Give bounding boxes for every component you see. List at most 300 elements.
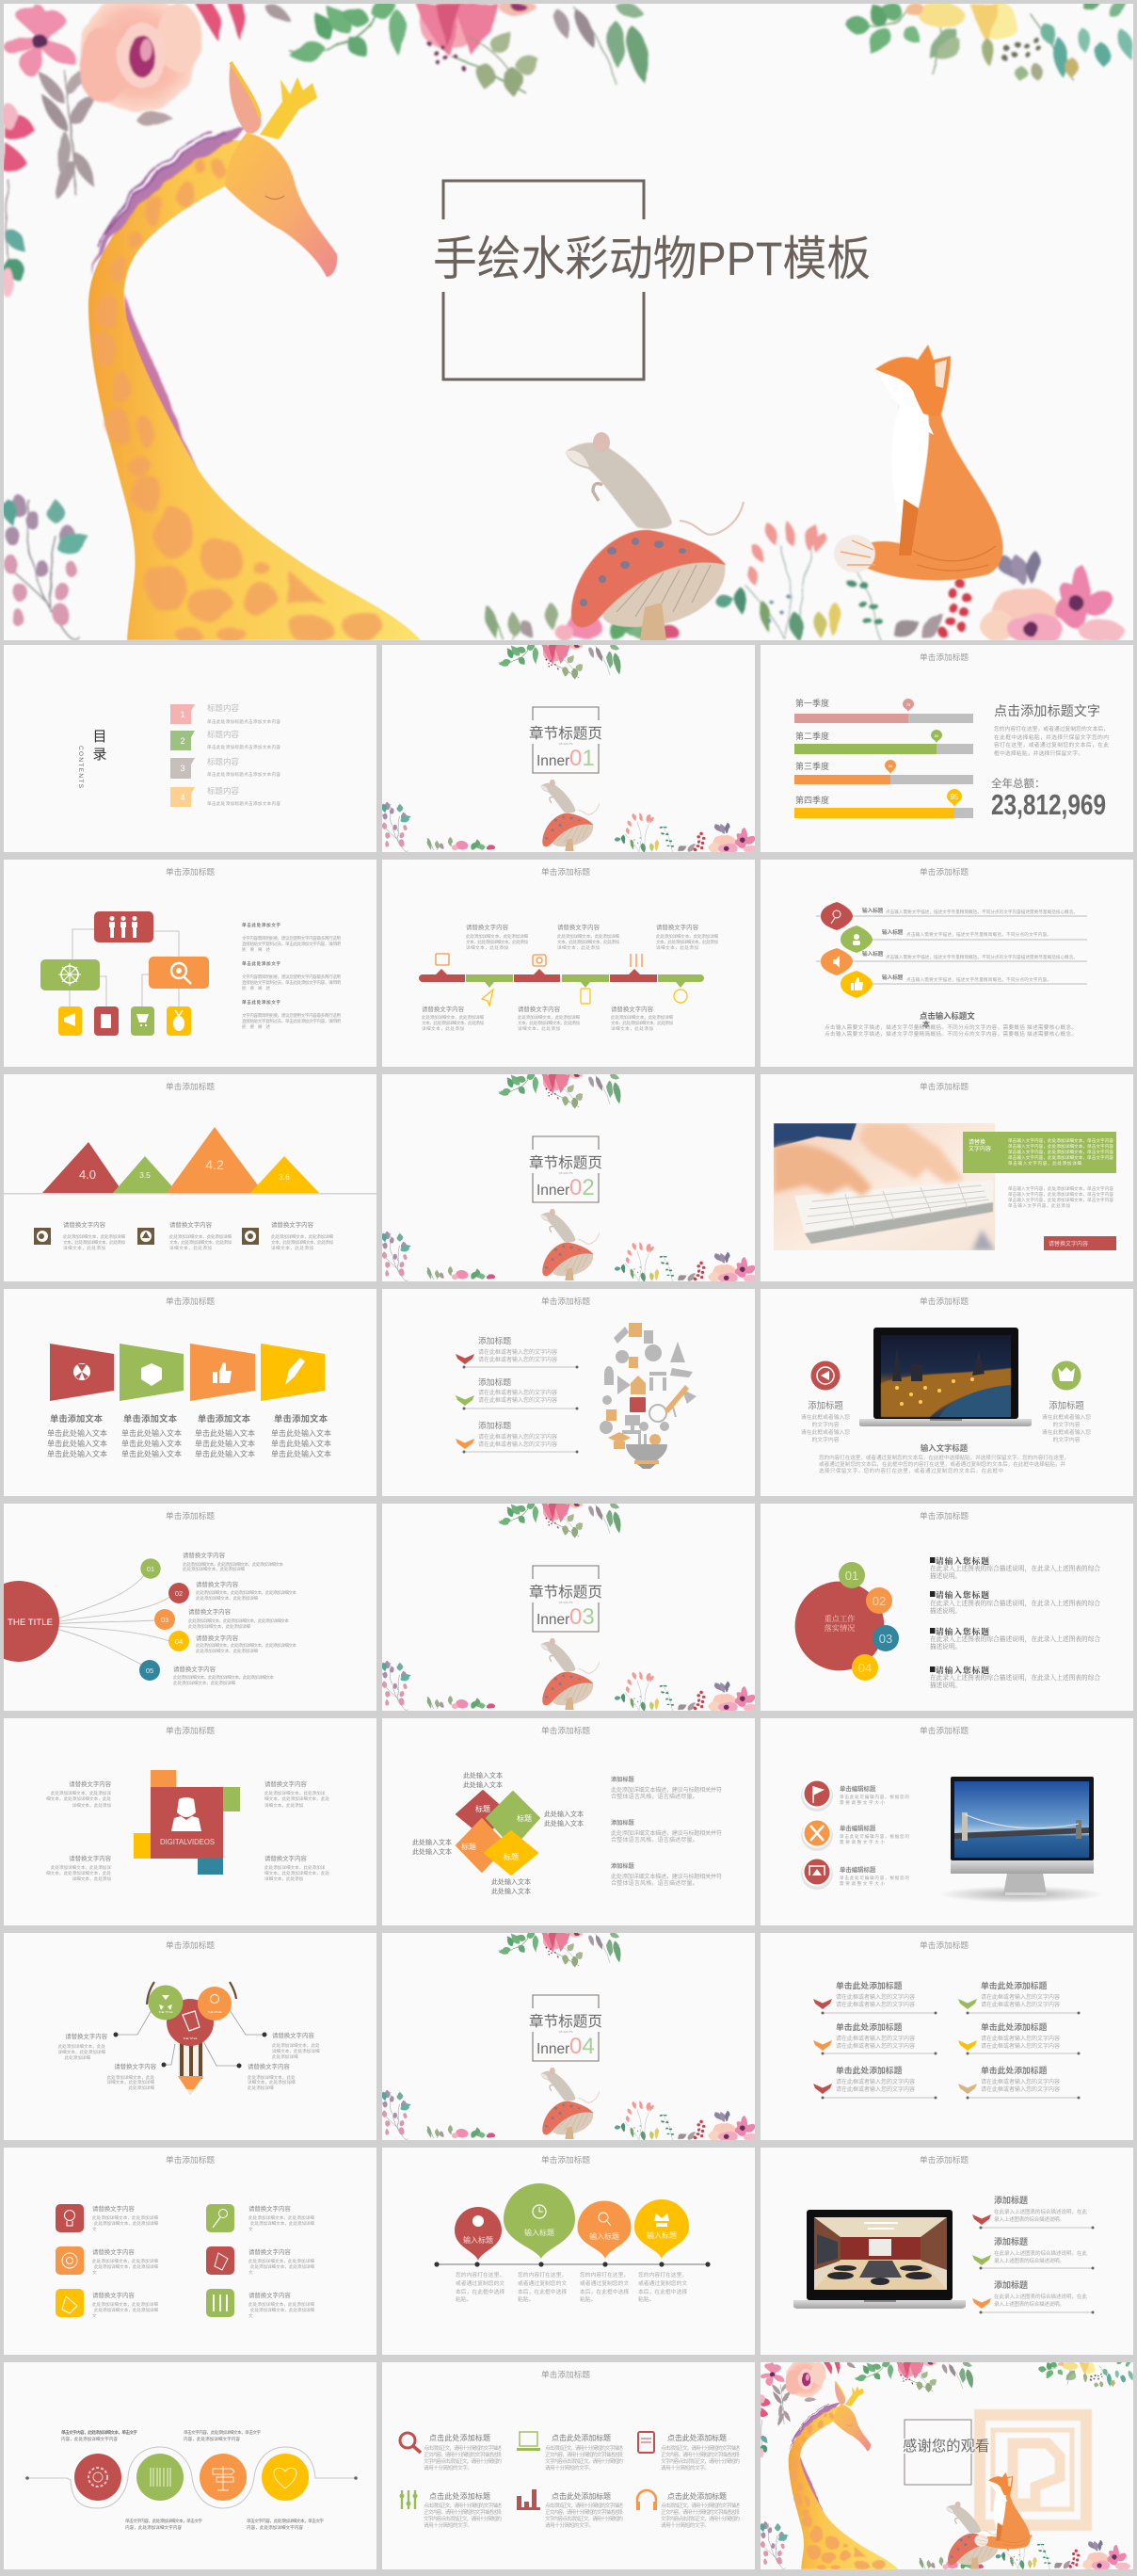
triangle chart: 4.2 bbox=[205, 1157, 224, 1172]
paragraph: 您的内容打在这里，或者通过复制您的文本后， bbox=[994, 725, 1109, 733]
pencil: THE TITLE bbox=[208, 2010, 221, 2014]
callout: lower left: 请替换文字内容 bbox=[114, 2062, 157, 2070]
feature 1: 文字内容点击添加正文，请用十分简短的 bbox=[424, 2457, 502, 2465]
icon: light bulb made of icons bbox=[600, 1323, 697, 1469]
heading: contents: CONTENTS bbox=[77, 746, 84, 788]
item 2: 标题内容 bbox=[207, 730, 240, 739]
illustration: bottom-right flowers bbox=[714, 521, 1124, 644]
text list: 需要调整文字大小 bbox=[840, 1839, 885, 1845]
pencil bbox=[149, 1985, 232, 2095]
node 03: 此处添加详细文本，此处添加详细文本，此处添加详细文本 bbox=[188, 1618, 289, 1624]
item 3: 3 bbox=[180, 764, 185, 773]
text above: 文本，此处添加详细文本，此处添加 bbox=[466, 939, 528, 945]
bar: Q4: 95 bbox=[951, 793, 959, 801]
heading: contents bbox=[77, 729, 107, 788]
item 2: 单击此处添加标题 bbox=[981, 1980, 1048, 1990]
diamond labels bbox=[412, 1771, 584, 1895]
balloon: red: 输入标题 bbox=[463, 2235, 493, 2245]
list item 3 bbox=[972, 2279, 1094, 2314]
circle 03 bbox=[873, 1625, 899, 1651]
section artwork bbox=[381, 642, 760, 854]
text top: 内容，此处添加详细文字内容 bbox=[184, 2436, 240, 2442]
item 1: 单击此处添加标题 bbox=[836, 1980, 903, 1990]
panel: section 03 bbox=[381, 1501, 760, 1713]
text above: 请替换文字内容 bbox=[466, 923, 509, 931]
diamond cluster: 标题 bbox=[504, 1852, 519, 1861]
slide title: 单击添加标题 bbox=[920, 1296, 969, 1306]
callout: right: 请替换文字内容 bbox=[272, 2031, 314, 2039]
captions: 或者通过复制您的文 bbox=[638, 2279, 687, 2287]
square: key: 此处添加详细文本，此处添加详细 bbox=[248, 2214, 314, 2221]
pin: red bbox=[821, 902, 853, 930]
square: target: 此处添加详细文本，此处添加详细 bbox=[94, 2263, 158, 2270]
node 02: 02 bbox=[175, 1589, 183, 1598]
node 02: 请替换文字内容 bbox=[196, 1580, 239, 1588]
panel: diamonds bbox=[382, 1718, 755, 1925]
green text panel: 单击输入文字内容，此处添加详细文本，单击文字内容 bbox=[1008, 1154, 1113, 1161]
green text panel: 单击输入文字内容，此处添加详细 bbox=[1008, 1160, 1081, 1167]
column 1 text bbox=[47, 1413, 107, 1458]
item 6: 请在此框或者输入您的文字内容 bbox=[981, 2078, 1060, 2085]
slide title: 单击添加标题 bbox=[920, 652, 969, 662]
text items: 在此录入上述图表的综合描述说明，在此录入上述图表的综合 bbox=[930, 1564, 1100, 1573]
column 3 text: 单击添加文本 bbox=[198, 1413, 251, 1424]
text blocks bbox=[63, 1220, 333, 1251]
text left top bbox=[46, 1779, 112, 1809]
text blocks bbox=[242, 922, 341, 1030]
summary: 点击输入需要文字描述，描述文字尽量精简概括。不同分点的文字内容，需要概括 描述需要核心概念。 bbox=[825, 1023, 1077, 1031]
text list bbox=[840, 1784, 909, 1887]
text right: 的文字内容 bbox=[1052, 1421, 1081, 1428]
illustration: bottom-left branch bbox=[0, 495, 91, 640]
body text bbox=[1008, 1185, 1113, 1209]
panel: thanks slide bbox=[759, 2358, 1135, 2570]
text left top: 详细文本，此处添加 bbox=[72, 1802, 111, 1809]
text items: 请输入您标题 bbox=[936, 1665, 989, 1675]
circle 01 bbox=[839, 1562, 865, 1588]
pin: yellow bbox=[841, 971, 873, 998]
circle 02 bbox=[866, 1587, 892, 1614]
node 03: 请替换文字内容 bbox=[188, 1607, 232, 1616]
node 01: 此处添加详细文本，此处添加详细 bbox=[183, 1566, 245, 1572]
body text: 单击输入文字内容，此处添加 bbox=[1008, 1202, 1070, 1209]
captions: 或者通过复制您的文 bbox=[518, 2279, 567, 2287]
feature 2: 请用十分简短的文字。 bbox=[545, 2464, 594, 2471]
text list: 需要调整文字大小 bbox=[840, 1799, 885, 1806]
bar: Q1: 75 bbox=[906, 702, 911, 707]
circle icon right bbox=[1052, 1361, 1081, 1390]
text right top: 详细文本，此处添加 bbox=[264, 1802, 304, 1809]
panel: six chevron items bbox=[761, 1933, 1133, 2140]
text below: 请替换文字内容 bbox=[518, 1005, 561, 1013]
circle 04 bbox=[852, 1654, 878, 1681]
feature 6: 点击添加正文，请用十分简短的文字描述 bbox=[661, 2502, 740, 2509]
item 2 bbox=[170, 730, 280, 750]
slide title: 单击添加标题 bbox=[541, 1296, 590, 1306]
text list: 需要调整文字大小 bbox=[840, 1880, 885, 1887]
icon: tools bbox=[801, 1819, 833, 1851]
feature 2: 点击此处添加标题 bbox=[552, 2433, 611, 2442]
column 4 text bbox=[271, 1413, 331, 1458]
panel: banners bbox=[4, 1289, 376, 1496]
paragraph: 在此框中选择粘贴，并选择只保留文字您的内 bbox=[994, 733, 1109, 741]
text above: 详细文本，此处添加 bbox=[656, 944, 698, 951]
right text: 合整体语言风格，语言描述尽量。 bbox=[611, 1879, 698, 1887]
node 02 bbox=[168, 1580, 296, 1603]
body text: 单击输入文字内容，此处添加详细文本，单击文字内容 bbox=[1008, 1197, 1113, 1203]
feature 6: 点击此处添加标题 bbox=[667, 2491, 727, 2501]
square: target bbox=[56, 2246, 158, 2276]
panel: light bulb bbox=[382, 1289, 755, 1496]
node 05: 请替换文字内容 bbox=[173, 1665, 216, 1673]
circle: barcode bbox=[136, 2454, 184, 2501]
item 4: 请在此框或者输入您的文字内容 bbox=[981, 2035, 1060, 2042]
circle 04: 04 bbox=[858, 1661, 872, 1675]
feature 3: 点击添加正文，请用十分简短的文字描述 bbox=[661, 2444, 740, 2452]
bar: Q1: 第一季度 bbox=[795, 698, 829, 708]
text left: 添加标题 bbox=[808, 1400, 843, 1410]
callout: lower right: 此处添加详细 bbox=[248, 2085, 274, 2091]
text left top: 此处添加详细文本，此处添加详 bbox=[51, 1790, 111, 1796]
square: tag bbox=[56, 2289, 158, 2319]
text items: 描述说明。 bbox=[930, 1606, 961, 1615]
thanks text: 感谢您的观看 bbox=[903, 2438, 989, 2455]
heading: add title text: 点击添加标题文字 bbox=[994, 703, 1100, 718]
banner: yellow bbox=[261, 1344, 325, 1401]
list item 3: 在此录入上述图表的综合描述说明，在此 bbox=[994, 2293, 1087, 2300]
text blocks: 单击此处添加文字 bbox=[242, 922, 280, 928]
colour blocks: DIGITALVIDEOS bbox=[160, 1838, 215, 1846]
node 04: 此处添加详细文本，此处添加详细文本，此处添加详细文本 bbox=[196, 1642, 296, 1649]
column 1 text: 单击添加文本 bbox=[50, 1413, 104, 1424]
connectors bbox=[70, 929, 179, 1006]
paragraph: 框中选择粘贴，并选择只保留文字。 bbox=[994, 749, 1083, 757]
panel: org chart bbox=[4, 860, 376, 1067]
text blocks: 此处添加详细文本，此处添加详细 bbox=[169, 1233, 232, 1240]
bar: Q2: 第二季度 bbox=[795, 731, 829, 741]
column 4 text: 单击此处输入文本 bbox=[271, 1439, 331, 1448]
text below: 详细文本，此处添加 bbox=[518, 1025, 560, 1032]
node 05: 05 bbox=[146, 1666, 153, 1675]
section number: 04 bbox=[569, 2034, 595, 2059]
photo: keyboard and hands bbox=[774, 1123, 995, 1250]
text left: 的文字内容 bbox=[811, 1436, 840, 1443]
baseline bbox=[4, 1193, 376, 1194]
end dots bbox=[25, 2476, 358, 2480]
square: bulb: 请替换文字内容 bbox=[92, 2204, 135, 2213]
callout: lower right: 请替换文字内容 bbox=[248, 2062, 290, 2070]
column 2 text bbox=[121, 1413, 182, 1458]
summary text bbox=[819, 1443, 1069, 1474]
panel: four circles chain bbox=[4, 2362, 376, 2569]
column 3 text: 单击此处输入文本 bbox=[195, 1428, 255, 1438]
text blocks: 文字内容需简明扼要，建议您使用文字内容最多两行适用 bbox=[242, 935, 341, 942]
list item 3: 录入上述图表的综合描述说明。 bbox=[994, 2300, 1065, 2308]
list item 3: 请在此框或者输入您的文字内容 bbox=[478, 1433, 557, 1441]
rules bbox=[816, 916, 1087, 984]
row text: 点击输入需要文字描述，描述文字尽量精简概括。不同分点的文字内容描述需要尽量概括核心概念。 bbox=[886, 909, 1078, 915]
captions: 或者通过复制您的文 bbox=[456, 2279, 504, 2287]
text below: 文本，此处添加详细文本，此处添加 bbox=[611, 1020, 673, 1026]
column 4 text: 单击此处输入文本 bbox=[271, 1449, 331, 1458]
summary text: 选择只保留文字。您的内容打在这里，或者通过复制您的文本后，在此框中 bbox=[819, 1467, 1003, 1474]
feature 3: 正文内容，请用十分简短的文字描述这段 bbox=[661, 2451, 740, 2458]
item 4: 4 bbox=[180, 793, 185, 802]
row text: 点击输入需要文字描述，描述文字尽量精简概括。不同分点的文字内容。 bbox=[906, 931, 1051, 938]
panel: the title mind map bbox=[0, 1504, 376, 1711]
text list: 单击此处可编辑内容，根据您的 bbox=[840, 1875, 909, 1881]
list item 2: 在此录入上述图表的综合描述说明，在此 bbox=[994, 2249, 1087, 2257]
captions: 粘贴。 bbox=[638, 2295, 654, 2303]
diamond labels: 此处输入文本 bbox=[463, 1780, 503, 1789]
text items: 描述说明。 bbox=[930, 1681, 961, 1689]
feature 4: 点击添加正文，请用十分简短的文字描述 bbox=[424, 2502, 502, 2509]
feature 4: 文字内容点击添加正文，请用十分简短的 bbox=[424, 2515, 502, 2522]
summary text: 您的内容打在这里，或者通过复制您的文本后，在此框中选择粘贴，并选择只保留文字。您的内容打在这里， bbox=[819, 1454, 1069, 1461]
text left bottom: 此处添加详细文本，此处添加详 bbox=[51, 1864, 111, 1871]
node 01 bbox=[140, 1551, 283, 1579]
banner: red bbox=[50, 1344, 114, 1401]
feature 5: 正文内容，请用十分简短的文字描述这段 bbox=[545, 2508, 623, 2516]
diamond cluster bbox=[456, 1791, 539, 1875]
leader lines bbox=[116, 2010, 264, 2066]
timeline bar bbox=[419, 969, 704, 988]
node 03 bbox=[154, 1607, 289, 1630]
text below bbox=[422, 1005, 673, 1032]
square: bulb bbox=[56, 2204, 158, 2232]
text above: 此处添加详细文本，此处添加详细 bbox=[656, 933, 718, 940]
circle: heart bbox=[262, 2454, 309, 2501]
text right top: 请替换文字内容 bbox=[264, 1779, 307, 1788]
banner: orange bbox=[190, 1344, 255, 1401]
large circle: 落实情况 bbox=[825, 1623, 855, 1633]
item 1: 请在此框或者输入您的文字内容 bbox=[836, 2001, 915, 2008]
callout: left: 此处添加详细 bbox=[64, 2054, 90, 2061]
square: key: 文 bbox=[248, 2226, 253, 2232]
text blocks: 请替换文字内容 bbox=[63, 1220, 106, 1229]
text blocks: 直接粘贴文字复制过去，单击此处添加文字内容，请简明 bbox=[242, 941, 341, 947]
green text panel: 单击输入文字内容，此处添加详细文本，单击文字内容 bbox=[1008, 1137, 1113, 1144]
square: bell bbox=[206, 2246, 314, 2276]
feature 3: 请用十分简短的文字。 bbox=[661, 2464, 710, 2471]
panel: pencil diagram bbox=[4, 1933, 376, 2140]
right text: 添加标题 bbox=[611, 1862, 635, 1870]
chain outline bbox=[27, 2447, 356, 2508]
panel: six icon features bbox=[382, 2362, 755, 2569]
item 3: 请在此框或者输入您的文字内容 bbox=[836, 2042, 915, 2050]
square: sliders bbox=[206, 2289, 314, 2319]
text right top: 细文本，此处添加详细文本，此处 bbox=[264, 1795, 329, 1802]
banner: green bbox=[120, 1344, 184, 1401]
text right bottom: 详细文本，此处添加 bbox=[264, 1876, 304, 1882]
captions: 粘贴。 bbox=[456, 2295, 472, 2303]
text below: 文本，此处添加详细文本，此处添加 bbox=[422, 1020, 484, 1026]
column 3 text: 单击此处输入文本 bbox=[195, 1449, 255, 1458]
text blocks: 文本，此处添加详细文本，此处添加 bbox=[169, 1239, 232, 1246]
list item 1: 添加标题 bbox=[994, 2195, 1028, 2205]
green text panel: 单击输入文字内容，此处添加详细文本，单击文字内容 bbox=[1008, 1143, 1113, 1150]
title frame bbox=[443, 181, 644, 379]
callout: right: 此处添加详细 bbox=[272, 2053, 298, 2060]
panel: pins list bbox=[761, 860, 1133, 1067]
bar: Q4 bbox=[794, 789, 973, 818]
square: target: 此处添加详细文本，此处添加详细 bbox=[92, 2258, 158, 2264]
text blocks: 直接粘贴文字复制过去，单击此处添加文字内容，请简明 bbox=[242, 979, 341, 986]
item 1 bbox=[813, 1980, 937, 2015]
text blocks: 详细文本，此处添加 bbox=[271, 1245, 313, 1251]
slide title: 单击添加标题 bbox=[920, 1510, 969, 1521]
text above: 此处添加详细文本，此处添加详细 bbox=[466, 933, 528, 940]
callout: lower left bbox=[106, 2062, 166, 2091]
summary: 点击输入需要文字描述，描述文字尽量精简概括。不同分点的文字内容，需要概括 描述需要核心概念。 bbox=[825, 1030, 1077, 1038]
text right bottom: 此处添加详细文本，此处添加详 bbox=[264, 1864, 326, 1871]
section number: 02 bbox=[569, 1175, 595, 1200]
text below: 详细文本，此处添加 bbox=[422, 1025, 464, 1032]
icon: upload bbox=[801, 1857, 833, 1890]
text top: 单击文字内容，此处添加详细文本，单击文字 bbox=[184, 2429, 261, 2436]
column 2 text: 单击此处输入文本 bbox=[121, 1449, 182, 1458]
text right: 的文字内容 bbox=[1052, 1436, 1081, 1443]
column 2 text: 单击添加文本 bbox=[123, 1413, 178, 1424]
panel: laptop boardroom bbox=[761, 2148, 1133, 2355]
section number: 01 bbox=[569, 746, 595, 771]
monitor bbox=[938, 1777, 1104, 1903]
text bottom: 单击文字内容，此处添加详细文本，单击文字 bbox=[247, 2518, 324, 2524]
bar: Q3: 第三季度 bbox=[795, 761, 829, 771]
list item 2: 添加标题 bbox=[994, 2236, 1028, 2246]
text items: 在此录入上述图表的综合描述说明，在此录入上述图表的综合 bbox=[930, 1634, 1100, 1644]
text items: 在此录入上述图表的综合描述说明，在此录入上述图表的综合 bbox=[930, 1599, 1100, 1608]
text blocks: 此处添加详细文本，此处添加详细 bbox=[271, 1233, 333, 1240]
item 3: 单击此处添加标题点击添加文本内容 bbox=[207, 771, 280, 778]
text right: 请在此框或者输入您 bbox=[1042, 1413, 1091, 1421]
pencil: THE TITLE bbox=[184, 2037, 197, 2040]
central circle: THE TITLE bbox=[8, 1618, 53, 1628]
laptop bbox=[859, 1328, 1032, 1426]
item 4: 标题内容 bbox=[207, 786, 240, 796]
text blocks: 文本，此处添加详细文本，此处添加 bbox=[271, 1239, 333, 1246]
text blocks: 扼要阐述 bbox=[242, 946, 270, 953]
text items: 描述说明。 bbox=[930, 1571, 961, 1580]
square: bell: 此处添加详细文本，此处添加详细 bbox=[248, 2258, 314, 2264]
text list: 单击编辑标题 bbox=[840, 1824, 876, 1832]
text list: 单击编辑标题 bbox=[840, 1865, 876, 1874]
captions: 本后，在此框中选择 bbox=[580, 2288, 629, 2295]
list item 1: 请在此框或者输入您的文字内容 bbox=[478, 1356, 557, 1363]
text below: 详细文本，此处添加 bbox=[611, 1025, 653, 1032]
text left bottom: 详细文本，此处添加 bbox=[72, 1876, 111, 1882]
feature 6 bbox=[636, 2490, 740, 2529]
balloon: yellow: 输入标题 bbox=[647, 2230, 677, 2240]
watermark logo bbox=[980, 2415, 1086, 2525]
body text: 单击输入文字内容，此处添加详细文本，单击文字内容 bbox=[1008, 1191, 1113, 1198]
icon: flag bbox=[801, 1779, 833, 1811]
text items bbox=[930, 1555, 1100, 1689]
panel: timeline bbox=[382, 860, 755, 1067]
pin: green bbox=[841, 926, 873, 953]
feature 3: 点击此处添加标题 bbox=[667, 2433, 727, 2442]
bar: Q3: 60 bbox=[889, 764, 893, 768]
item 5: 请在此框或者输入您的文字内容 bbox=[836, 2078, 915, 2085]
panel: six icon squares bbox=[4, 2148, 376, 2355]
feature 6: 文字内容点击添加正文，请用十分简短的 bbox=[661, 2515, 740, 2522]
captions: 本后，在此框中选择 bbox=[518, 2288, 567, 2295]
small icon boxes bbox=[58, 1006, 191, 1036]
square: bulb: 此处添加详细文本，此处添加详细 bbox=[92, 2214, 158, 2221]
feature 3: 文字内容点击添加正文，请用十分简短的 bbox=[661, 2457, 740, 2465]
column 1 text: 单击此处输入文本 bbox=[47, 1449, 107, 1458]
diamond cluster: 标题 bbox=[461, 1842, 476, 1851]
column 4 text: 单击添加文本 bbox=[274, 1413, 328, 1424]
text blocks: 文字内容需简明扼要，建议您使用文字内容最多两行适用 bbox=[242, 974, 341, 980]
item 1: 标题内容 bbox=[207, 703, 240, 713]
item 2 bbox=[958, 1980, 1081, 2015]
icons above bbox=[436, 954, 642, 967]
text blocks: 扼要阐述 bbox=[242, 985, 270, 991]
square: sliders: 此处添加详细文本，此处添加详细 bbox=[248, 2301, 314, 2308]
square: sliders: 请替换文字内容 bbox=[248, 2291, 291, 2299]
illustration: top-left flowers bbox=[0, 0, 293, 298]
diamond labels: 此处输入文本 bbox=[544, 1819, 584, 1827]
square: sliders: 文 bbox=[248, 2312, 253, 2319]
feature 4 bbox=[399, 2490, 502, 2529]
slide title: 单击添加标题 bbox=[166, 1510, 215, 1521]
row text bbox=[862, 907, 1078, 983]
circle 02: 02 bbox=[873, 1594, 886, 1608]
text above: 此处添加详细文本，此处添加详细 bbox=[557, 933, 619, 940]
item 3 bbox=[813, 2021, 937, 2054]
illustration: ground flowers bbox=[483, 602, 680, 644]
triangle chart: 3.6 bbox=[279, 1172, 290, 1182]
item 2: 请在此框或者输入您的文字内容 bbox=[981, 2001, 1060, 2008]
text bottom: 单击文字内容，此处添加详细文本，单击文字 bbox=[125, 2518, 202, 2524]
summary: 本 bbox=[922, 1020, 930, 1029]
text top: 内容，此处添加详细文字内容 bbox=[61, 2436, 118, 2442]
slide title: 单击添加标题 bbox=[166, 1081, 215, 1091]
node 01: 此处添加详细文本，此处添加详细文本，此处添加详细文本 bbox=[183, 1561, 283, 1568]
item 5: 请在此框或者输入您的文字内容 bbox=[836, 2085, 915, 2093]
feature 4: 点击此处添加标题 bbox=[429, 2491, 490, 2501]
text above bbox=[466, 923, 718, 951]
text left top: 细文本，此处添加详细文本，此处 bbox=[46, 1795, 111, 1802]
circle 01: 01 bbox=[845, 1569, 858, 1583]
item 2: 2 bbox=[180, 736, 185, 746]
green text panel: 请替换 bbox=[969, 1138, 985, 1146]
right text: 合整体语言风格，语言描述尽量。 bbox=[611, 1793, 698, 1800]
section number: 03 bbox=[569, 1604, 595, 1630]
text above: 文本，此处添加详细文本，此处添加 bbox=[656, 939, 718, 945]
brown arcs bbox=[147, 1982, 236, 2004]
row text: 输入标题 bbox=[862, 907, 884, 914]
text right: 请在此框或者输入您 bbox=[1042, 1428, 1091, 1436]
list item 1 bbox=[972, 2195, 1094, 2230]
node 02: 此处添加详细文本，此处添加详细文本，此处添加详细文本 bbox=[196, 1589, 296, 1596]
feature 2: 文字内容点击添加正文，请用十分简短的 bbox=[545, 2457, 623, 2465]
annual total: 全年总额： bbox=[991, 777, 1045, 790]
feature 4: 正文内容，请用十分简短的文字描述这段 bbox=[424, 2508, 502, 2516]
node 04: 请替换文字内容 bbox=[196, 1634, 239, 1642]
column 2 text: 单击此处输入文本 bbox=[121, 1428, 182, 1438]
node 03: 此处添加详细文本，此处添加详细 bbox=[188, 1623, 250, 1630]
bar: Q1 bbox=[794, 698, 973, 723]
slide title: 单击添加标题 bbox=[920, 2154, 969, 2165]
balloon: red bbox=[455, 2207, 502, 2261]
item 4: 请在此框或者输入您的文字内容 bbox=[981, 2042, 1060, 2050]
item 4 bbox=[958, 2021, 1081, 2054]
illustration: giraffe bbox=[88, 62, 421, 642]
text bottom bbox=[125, 2518, 324, 2531]
list item 1: 请在此框或者输入您的文字内容 bbox=[478, 1348, 557, 1356]
